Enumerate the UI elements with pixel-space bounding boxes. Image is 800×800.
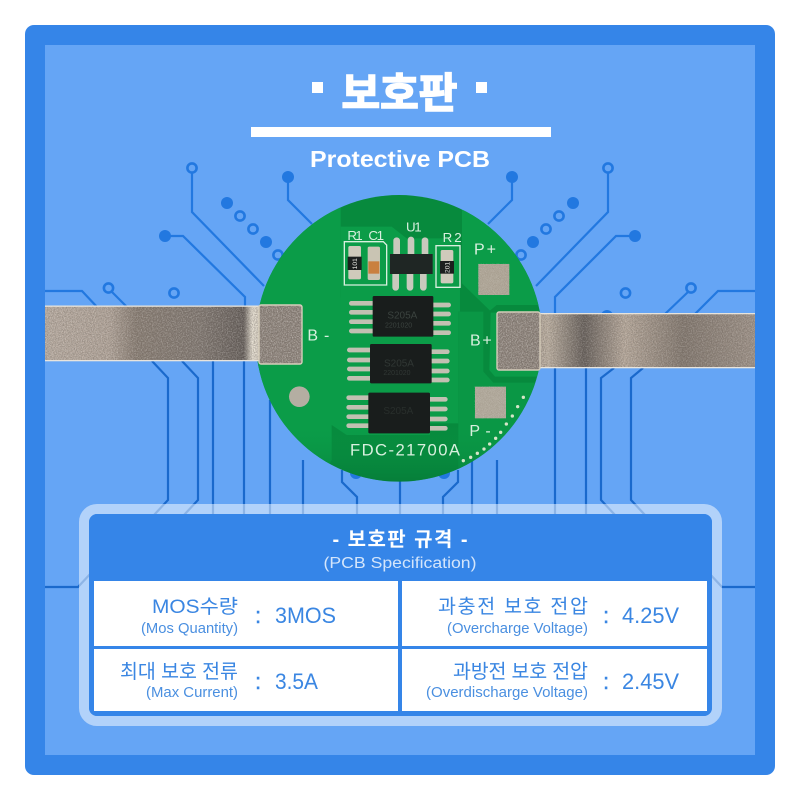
specification panel bbox=[84, 509, 717, 721]
silkscreen labels: C1 bbox=[368, 228, 384, 243]
cell: overcharge voltage bbox=[402, 581, 707, 646]
cell: overcharge voltage: (Overcharge Voltage) bbox=[447, 620, 588, 637]
MOSFET chip 3: S205A bbox=[383, 406, 414, 417]
resistor R2: 201 bbox=[444, 262, 451, 273]
resistor R1: 101 bbox=[352, 258, 359, 269]
pad: P+ bbox=[478, 264, 509, 295]
MOSFET chip 2: S205A bbox=[384, 359, 414, 370]
title: Korean heading with square bullets bbox=[312, 70, 487, 117]
mounting pad bbox=[289, 386, 310, 407]
subtitle: Protective PCB: Protective PCB bbox=[310, 146, 490, 172]
cell: overcharge voltage: : bbox=[603, 603, 609, 628]
resistor R1 bbox=[348, 246, 362, 279]
cell: max current: : bbox=[255, 669, 261, 694]
MOSFET chip 2: 2201020 bbox=[383, 370, 411, 377]
MOSFET chip 1 bbox=[351, 296, 449, 337]
cell: MOS quantity: (Mos Quantity) bbox=[141, 620, 238, 637]
via dots along the edge bbox=[462, 396, 525, 462]
MOSFET chip 1: S205A bbox=[387, 310, 418, 321]
left nickel strap bbox=[45, 305, 302, 364]
cell: MOS quantity bbox=[94, 581, 398, 646]
panel heading: (PCB Specification) bbox=[324, 555, 476, 572]
cell: overdischarge voltage: (Overdischarge Voltage) bbox=[426, 684, 588, 701]
silkscreen labels: P+ bbox=[474, 241, 496, 258]
circular green PCB bbox=[258, 195, 540, 482]
silkscreen labels: B- bbox=[307, 328, 329, 345]
component outlines: R1 C1 bbox=[344, 242, 387, 285]
cell: overdischarge voltage: 2.45V bbox=[622, 669, 679, 694]
copper area: left and centre bbox=[258, 207, 458, 464]
silkscreen labels bbox=[307, 219, 496, 459]
silkscreen labels: P- bbox=[469, 423, 491, 440]
cell: overdischarge voltage: 과방전 보호 전압 bbox=[453, 661, 588, 683]
silkscreen labels: B+ bbox=[470, 332, 492, 349]
title: Korean heading with square bullets: 보호판 bbox=[342, 70, 457, 117]
U1 SOT chip bbox=[390, 240, 433, 287]
MOSFET chip 3 bbox=[349, 393, 445, 433]
panel heading bbox=[324, 528, 476, 572]
cell: max current bbox=[94, 649, 398, 711]
resistor R2 bbox=[440, 250, 454, 283]
title underline bar bbox=[251, 127, 551, 137]
cell: overcharge voltage: 4.25V bbox=[622, 603, 679, 628]
cell: overcharge voltage: 과충전 보호 전압 bbox=[438, 596, 588, 618]
copper area: top centre around components bbox=[341, 227, 460, 312]
cell: max current: 최대 보호 전류 bbox=[120, 661, 238, 683]
cell: MOS quantity: : bbox=[255, 603, 261, 628]
pad: P- bbox=[475, 387, 506, 418]
cell: overdischarge voltage bbox=[402, 649, 707, 711]
right nickel strap bbox=[497, 312, 755, 370]
circuit trace background pattern bbox=[45, 163, 755, 587]
left strap weld tab bbox=[259, 305, 302, 364]
panel heading: - 보호판 규격 - bbox=[332, 528, 468, 551]
right strap weld tab bbox=[497, 312, 540, 370]
cell: MOS quantity: 3MOS bbox=[275, 603, 336, 628]
cell: overdischarge voltage: : bbox=[603, 669, 609, 694]
copper area: P+ zone bbox=[462, 210, 538, 310]
cell: max current: 3.5A bbox=[275, 669, 318, 694]
silkscreen labels: R2 bbox=[443, 230, 462, 245]
MOSFET chip 1: 2201020 bbox=[385, 322, 412, 329]
copper area: B+ and P- zone bbox=[458, 312, 536, 469]
capacitor C1 bbox=[368, 247, 380, 280]
silkscreen labels: R1 bbox=[347, 228, 363, 243]
MOSFET chip 2 bbox=[349, 344, 447, 383]
silkscreen labels: FDC-21700A bbox=[350, 440, 461, 459]
component outline: R2 bbox=[436, 246, 460, 287]
silkscreen labels: U1 bbox=[406, 219, 422, 234]
cell: MOS quantity: MOS수량 bbox=[152, 596, 238, 618]
cell: max current: (Max Current) bbox=[146, 684, 238, 701]
